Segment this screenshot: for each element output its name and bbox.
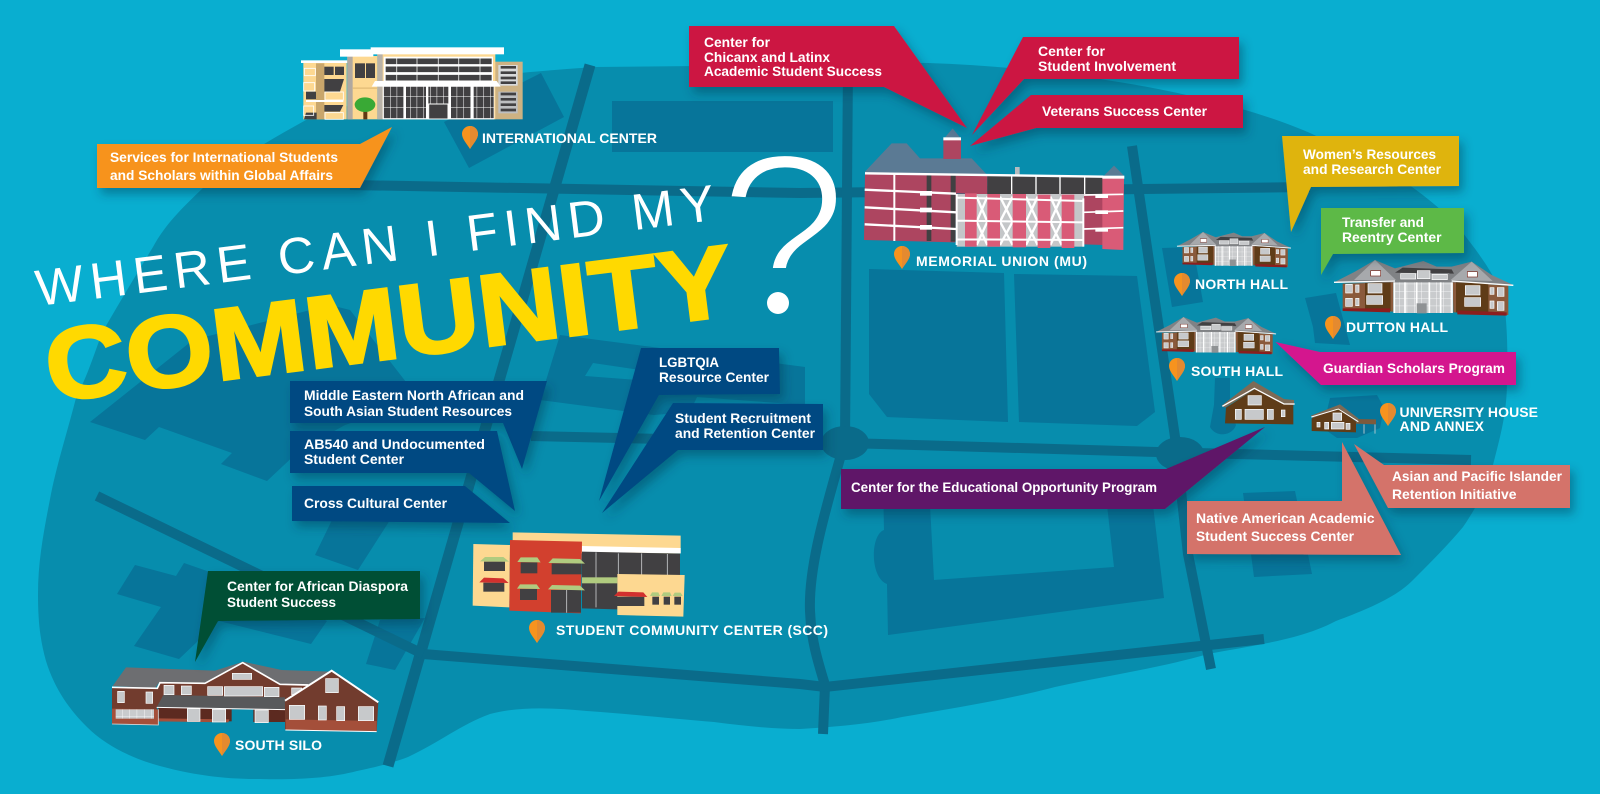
callout: international: and Scholars within Global Affairs bbox=[110, 167, 333, 183]
label: south silo bbox=[214, 733, 322, 756]
callout: veterans: Veterans Success Center bbox=[1042, 103, 1208, 119]
label: dutton hall bbox=[1325, 316, 1448, 339]
label: memorial union bbox=[894, 246, 1087, 269]
label: university house and annex: AND ANNEX bbox=[1400, 418, 1485, 434]
building: memorial union bbox=[864, 128, 1124, 250]
callout: native american bbox=[1187, 442, 1401, 555]
callout: international: Services for International Students bbox=[110, 149, 338, 165]
callout: african diaspora: Student Success bbox=[227, 594, 336, 610]
label: south hall bbox=[1169, 358, 1283, 381]
building: north hall bbox=[1177, 232, 1291, 267]
callout: middle eastern north african bbox=[290, 381, 547, 469]
callout: cross cultural bbox=[292, 486, 510, 523]
callout: ab540: AB540 and Undocumented bbox=[304, 436, 485, 452]
callout: transfer and reentry: Transfer and bbox=[1342, 214, 1424, 230]
callout: student recruitment bbox=[602, 403, 823, 513]
callout: lgbtqia bbox=[599, 348, 780, 501]
label: dutton hall: DUTTON HALL bbox=[1346, 319, 1448, 335]
callout: guardian scholars: Guardian Scholars Program bbox=[1323, 360, 1505, 376]
callout: student involvement bbox=[972, 37, 1239, 135]
callout: educational opportunity program: Center for the Educational Opportunity Program bbox=[851, 479, 1157, 495]
callout: womens resources: and Research Center bbox=[1303, 161, 1442, 177]
callout: transfer and reentry: Reentry Center bbox=[1342, 229, 1442, 245]
callout: chicanx and latinx bbox=[689, 26, 967, 128]
building: south hall bbox=[1156, 317, 1276, 354]
callout: chicanx and latinx: Academic Student Success bbox=[704, 63, 882, 79]
label: north hall bbox=[1174, 273, 1288, 296]
callout: middle eastern north african: South Asian Student Resources bbox=[304, 403, 512, 419]
callout: african diaspora: Center for African Diaspora bbox=[227, 578, 408, 594]
callout: asian and pacific islander: Retention Initiative bbox=[1392, 486, 1517, 502]
callout: veterans bbox=[970, 95, 1243, 146]
callout: student recruitment: and Retention Center bbox=[675, 425, 816, 441]
label: international center: INTERNATIONAL CENTER bbox=[482, 130, 657, 146]
label: memorial union: MEMORIAL UNION (MU) bbox=[916, 253, 1087, 269]
question mark bbox=[732, 156, 836, 314]
title line: where can i find my: WHERE CAN I FIND MY bbox=[32, 174, 718, 317]
title line: community: COMMUNITY bbox=[38, 223, 739, 424]
callout: native american: Student Success Center bbox=[1196, 528, 1355, 544]
callout: asian and pacific islander bbox=[1354, 444, 1570, 508]
callout: student recruitment: Student Recruitment bbox=[675, 410, 811, 426]
label: south silo: SOUTH SILO bbox=[235, 737, 322, 753]
building: student community center bbox=[473, 532, 685, 617]
label: university house and annex: UNIVERSITY HOUSE bbox=[1400, 404, 1538, 420]
callout: student involvement: Student Involvement bbox=[1038, 58, 1176, 74]
callout: ab540 bbox=[290, 431, 515, 511]
label: student community center bbox=[529, 620, 828, 643]
label: south hall: SOUTH HALL bbox=[1191, 363, 1283, 379]
callout: womens resources bbox=[1282, 136, 1459, 232]
callout: lgbtqia: Resource Center bbox=[659, 369, 770, 385]
callout: student involvement: Center for bbox=[1038, 43, 1106, 59]
callout: native american: Native American Academic bbox=[1196, 510, 1375, 526]
building: dutton hall bbox=[1334, 260, 1513, 316]
question mark: ? bbox=[718, 104, 848, 366]
label: international center bbox=[462, 126, 657, 149]
building: international center bbox=[301, 47, 523, 119]
callout: african diaspora bbox=[195, 571, 420, 662]
building: university house bbox=[1222, 381, 1295, 424]
callout: transfer and reentry bbox=[1321, 208, 1464, 275]
callout: middle eastern north african: Middle Eastern North African and bbox=[304, 387, 524, 403]
callout: international bbox=[97, 127, 392, 188]
callout: asian and pacific islander: Asian and Pacific Islander bbox=[1392, 468, 1563, 484]
callout: womens resources: Women’s Resources bbox=[1303, 146, 1436, 162]
label: university house and annex bbox=[1380, 403, 1538, 434]
map buildings bbox=[90, 73, 1384, 670]
callout: guardian scholars bbox=[1276, 342, 1516, 385]
title bbox=[32, 174, 739, 424]
callout: educational opportunity program bbox=[841, 427, 1265, 509]
map roads bbox=[97, 65, 1471, 766]
label: student community center: STUDENT COMMUNITY CENTER (SCC) bbox=[556, 622, 828, 638]
callout: chicanx and latinx: Chicanx and Latinx bbox=[704, 49, 830, 65]
building: annex bbox=[1311, 404, 1376, 434]
building: south silo bbox=[112, 662, 378, 732]
callout: chicanx and latinx: Center for bbox=[704, 34, 771, 50]
callout: ab540: Student Center bbox=[304, 451, 405, 467]
callout: lgbtqia: LGBTQIA bbox=[659, 354, 719, 370]
callout: cross cultural: Cross Cultural Center bbox=[304, 495, 448, 511]
label: north hall: NORTH HALL bbox=[1195, 276, 1288, 292]
